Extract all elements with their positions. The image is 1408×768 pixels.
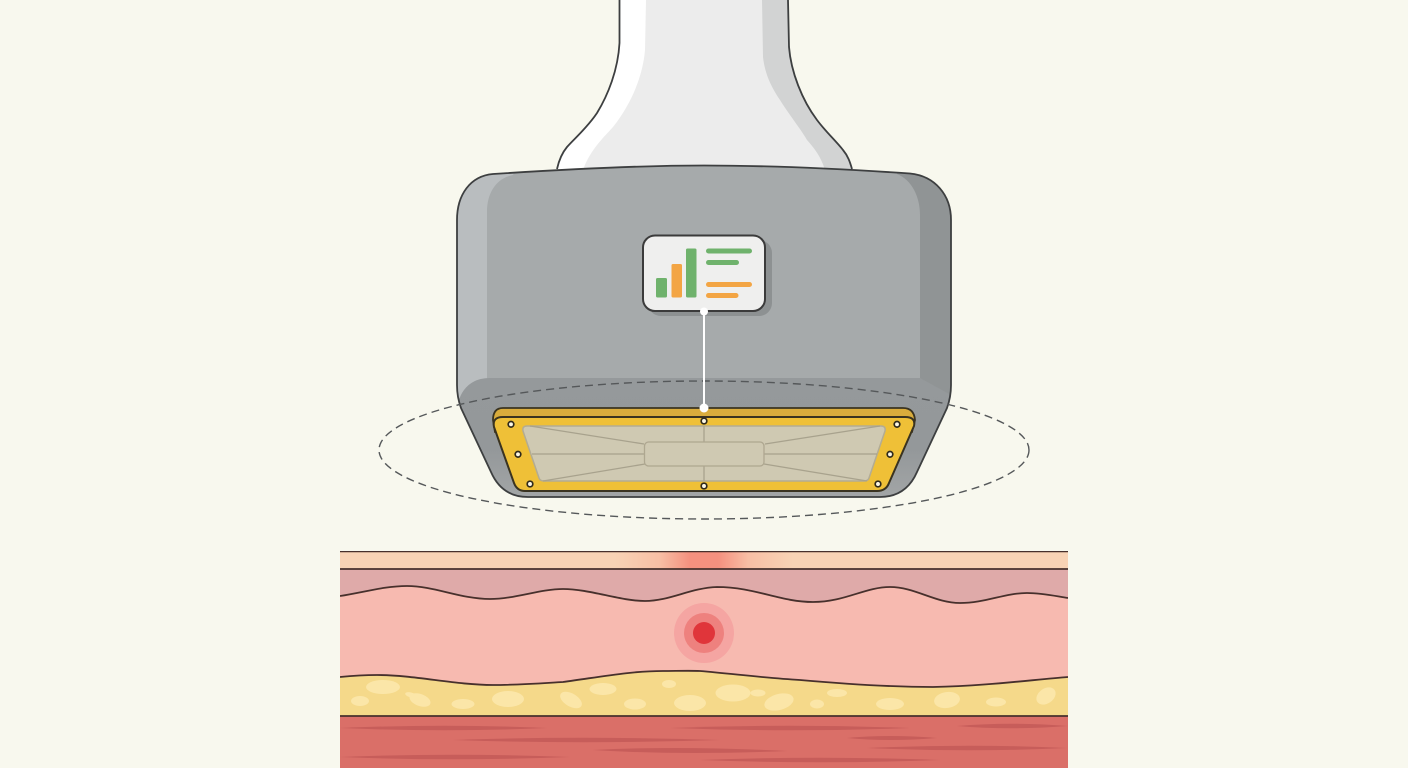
- acoustic lens panel: [523, 426, 885, 481]
- layer boundary lines: [340, 552, 1068, 716]
- focal target point: [674, 603, 734, 663]
- probe head body: [450, 160, 960, 505]
- muscle layer: [340, 716, 1068, 768]
- mid dermis layer: [340, 586, 1068, 690]
- muscle fibres: [340, 724, 1068, 762]
- surface heat glow: [633, 552, 774, 568]
- connector line from card to frame: [700, 308, 708, 412]
- icon: data card with bars and lines: [643, 236, 772, 316]
- fat layer: [340, 671, 1068, 716]
- gold transducer frame: [493, 408, 915, 491]
- fat globules: [351, 680, 1059, 714]
- tissue cross-section: [340, 551, 1068, 768]
- epidermis layer with surface heat: [340, 551, 1068, 569]
- probe handle neck: [550, 0, 860, 170]
- upper dermis layer: [340, 570, 1068, 602]
- infographic: ultrasound probe above tissue cross-section: [340, 0, 1068, 768]
- frame screws: [508, 418, 900, 489]
- dashed focus ellipse: [379, 381, 1029, 519]
